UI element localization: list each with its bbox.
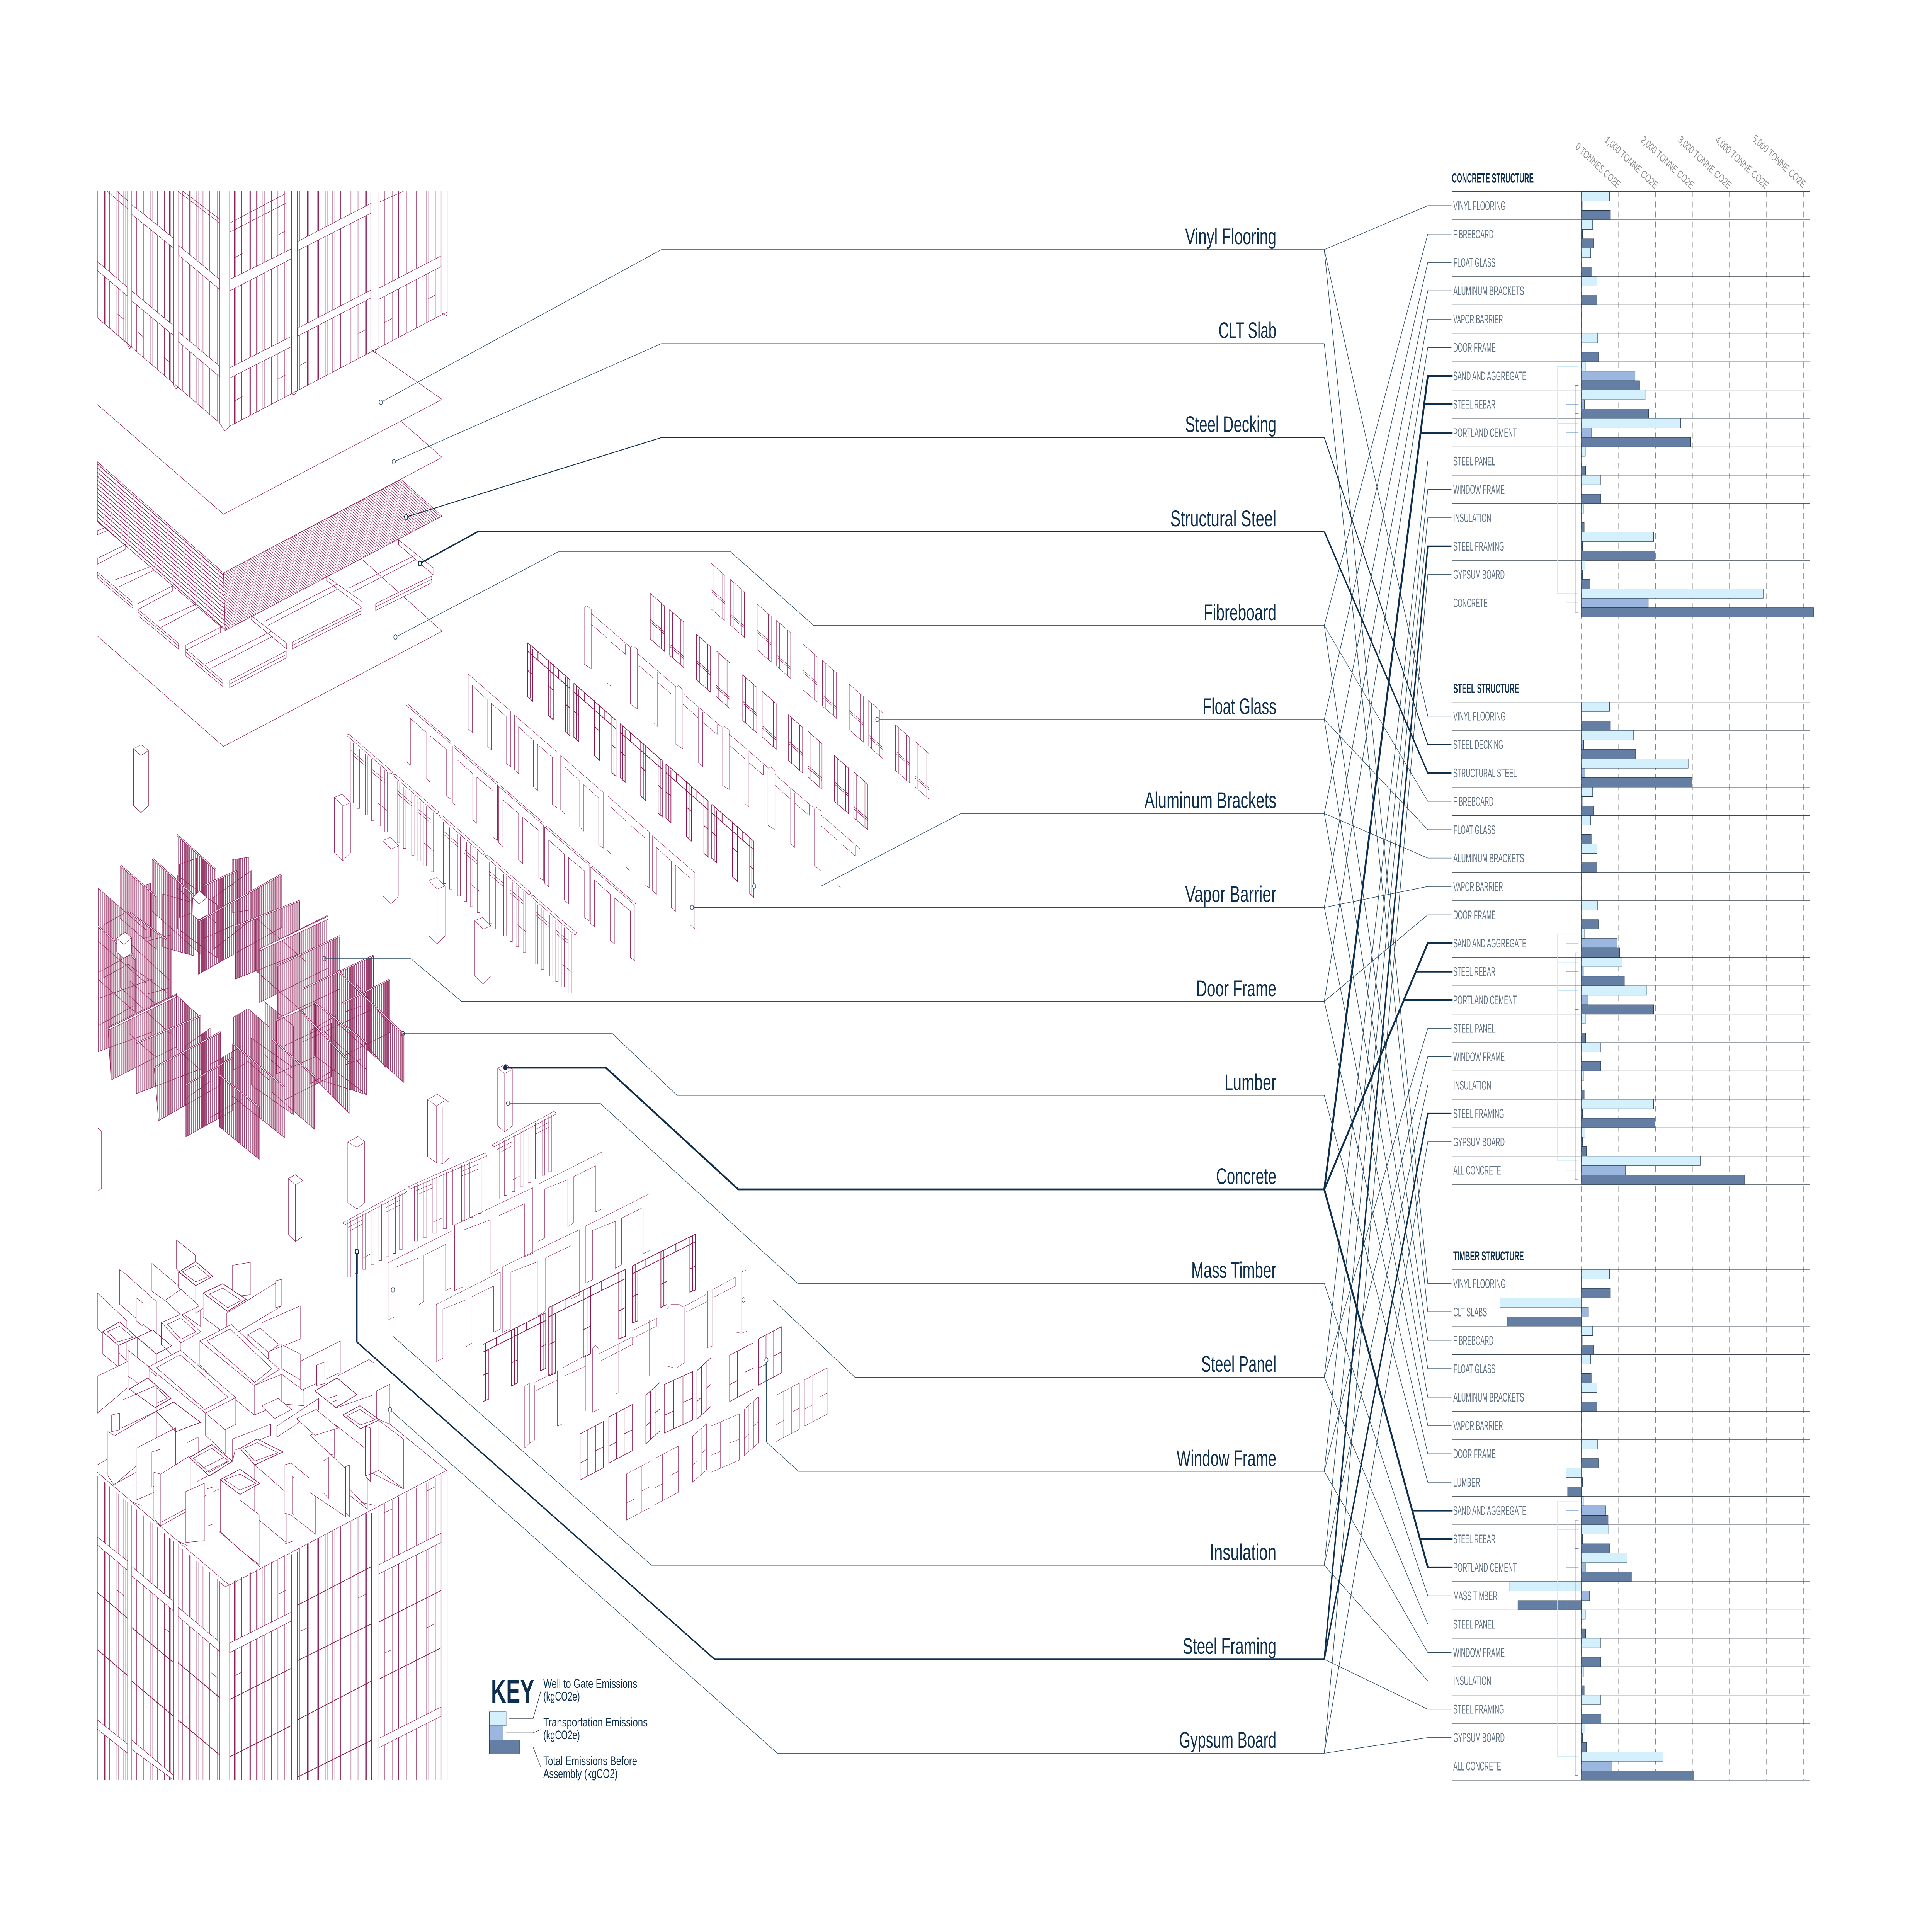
row: CLT slabs	[1452, 1298, 1810, 1326]
row: fibreboard: FIBREBOARD	[1453, 794, 1493, 808]
row: steel rebar: STEEL REBAR	[1453, 398, 1495, 411]
row: steel framing	[1452, 532, 1810, 560]
material label: Float Glass: Float Glass	[1202, 694, 1276, 719]
row: window frame	[1452, 1043, 1810, 1071]
key leader lines	[506, 1690, 541, 1768]
row: portland cement: PORTLAND CEMENT	[1453, 426, 1517, 440]
lower lintel wall	[525, 1270, 747, 1448]
row: window frame: WINDOW FRAME	[1453, 483, 1505, 497]
row: sand and aggregate: SAND AND AGGREGATE	[1453, 1504, 1526, 1517]
heading: steel structure: STEEL STRUCTURE	[1453, 682, 1519, 696]
row: steel panel: STEEL PANEL	[1453, 1618, 1495, 1631]
axis labels	[1574, 131, 1807, 192]
row: insulation: INSULATION	[1453, 1674, 1491, 1688]
row: gypsum board	[1452, 1128, 1810, 1156]
row: fibreboard: FIBREBOARD	[1453, 1334, 1493, 1347]
material label: Lumber	[401, 1031, 1324, 1095]
row: lumber: LUMBER	[1453, 1476, 1480, 1489]
row: sand and aggregate: SAND AND AGGREGATE	[1453, 937, 1526, 950]
row: all concrete total: ALL CONCRETE	[1453, 1759, 1501, 1773]
row: window frame: WINDOW FRAME	[1453, 1646, 1505, 1660]
row: steel panel	[1452, 1610, 1810, 1638]
material label: Steel Framing: Steel Framing	[1183, 1633, 1276, 1659]
row: lintel walls	[584, 606, 861, 888]
row: aluminum brackets	[1452, 277, 1810, 305]
row: vinyl flooring	[1452, 1269, 1810, 1298]
row: aluminum brackets: ALUMINUM BRACKETS	[1453, 851, 1524, 865]
swatch: transportation	[489, 1726, 503, 1740]
row: vapor barrier: VAPOR BARRIER	[1453, 880, 1503, 893]
row: float glass	[1452, 248, 1810, 277]
upper wall and window assemblies	[335, 563, 929, 993]
material label: CLT Slab: CLT Slab	[1219, 318, 1276, 343]
row: steel rebar	[1452, 1525, 1810, 1553]
connector fan: steel framing	[1324, 546, 1451, 1659]
row: steel framing: STEEL FRAMING	[1453, 539, 1504, 553]
floor plates, decking and steel beams	[97, 349, 442, 747]
heading: concrete structure: CONCRETE STRUCTURE	[1452, 171, 1534, 186]
lower columns	[348, 1064, 512, 1209]
row: steel rebar: STEEL REBAR	[1453, 965, 1495, 979]
key	[489, 1673, 648, 1781]
axis labels: 1,000 TONNE CO2E	[1603, 133, 1660, 192]
illustration: exploded isometric building	[97, 190, 929, 1783]
steel beams	[97, 527, 434, 688]
axis labels: 2,000 TONNE CO2E	[1639, 133, 1696, 192]
row: steel panel: STEEL PANEL	[1453, 1022, 1495, 1035]
material label: Door Frame	[323, 956, 1324, 1002]
row: door frame: DOOR FRAME	[1453, 341, 1496, 355]
row: concrete total: CONCRETE	[1453, 596, 1488, 610]
row: sand and aggregate	[1452, 1497, 1810, 1525]
material label: Float Glass	[876, 694, 1324, 722]
row: insulation: INSULATION	[1453, 1078, 1491, 1092]
material label: Gypsum Board: Gypsum Board	[1179, 1727, 1276, 1753]
row: door frame: DOOR FRAME	[1453, 908, 1496, 922]
row: mass timber: MASS TIMBER	[1453, 1589, 1497, 1603]
row: steel panel	[1452, 447, 1810, 475]
row: steel rebar: STEEL REBAR	[1453, 1532, 1495, 1546]
key text: total: Total Emissions Before	[543, 1754, 637, 1768]
bracket: concrete components sum	[1557, 366, 1578, 612]
row: aluminum brackets	[1452, 844, 1810, 872]
row: steel panel: STEEL PANEL	[1453, 454, 1495, 468]
material label: Vinyl Flooring	[379, 224, 1324, 405]
row: portland cement	[1452, 1553, 1810, 1582]
row: fibreboard	[1452, 787, 1810, 816]
swatch: well to gate	[489, 1712, 506, 1726]
row: float glass	[1452, 815, 1810, 844]
lumber stud wall framing	[98, 835, 404, 1191]
material label: Structural Steel	[418, 506, 1324, 566]
material label: Structural Steel: Structural Steel	[1170, 506, 1276, 531]
material label: Mass Timber	[507, 1101, 1324, 1283]
row: insulation	[1452, 1071, 1810, 1099]
row: mass timber	[1452, 1582, 1810, 1610]
row: steel framing: STEEL FRAMING	[1453, 1703, 1504, 1716]
steel decking: left wing	[97, 462, 225, 631]
key text: transportation: Transportation Emissions	[543, 1715, 648, 1729]
row: gypsum board: GYPSUM BOARD	[1453, 1135, 1505, 1149]
material label: Concrete	[503, 1065, 1324, 1189]
material label: Concrete: Concrete	[1216, 1163, 1276, 1189]
material label: Vapor Barrier: Vapor Barrier	[1185, 881, 1276, 907]
material label: Mass Timber: Mass Timber	[1191, 1257, 1276, 1283]
row: CLT slabs: CLT SLABS	[1453, 1305, 1487, 1319]
material label: Insulation	[391, 1288, 1324, 1565]
swatch: total	[489, 1740, 520, 1754]
bracket: steel structure concrete components sum	[1557, 934, 1578, 1180]
row: all concrete total	[1452, 1156, 1810, 1184]
lower building facade	[97, 1232, 441, 1783]
row: dark window units	[650, 594, 868, 830]
chart gridlines: emission scale	[1582, 192, 1803, 1780]
key title: KEY	[491, 1673, 534, 1709]
row: aluminum brackets	[1452, 1383, 1810, 1411]
partial column at the page edge	[98, 1128, 102, 1191]
row: vinyl flooring: VINYL FLOORING	[1453, 199, 1505, 213]
material label: Window Frame	[765, 1358, 1324, 1471]
row: vapor barrier: VAPOR BARRIER	[1453, 313, 1503, 326]
bracket: timber structure concrete components sum	[1557, 1501, 1578, 1776]
row: gypsum board: GYPSUM BOARD	[1453, 1731, 1505, 1745]
row: sand and aggregate: SAND AND AGGREGATE	[1453, 369, 1526, 383]
row: window frame	[1452, 1638, 1810, 1667]
chart: timber structure	[1452, 1249, 1810, 1780]
row: all concrete total: ALL CONCRETE	[1453, 1163, 1501, 1177]
row: thin door openings	[468, 674, 695, 929]
connector fan: structural steel	[1324, 532, 1451, 773]
connector fan: materials to chart rows, thin lines	[1324, 206, 1451, 1753]
material label: Aluminum Brackets	[753, 788, 1324, 888]
row: concrete total	[1452, 589, 1813, 617]
lone columns	[134, 745, 303, 1242]
material label: Steel Panel	[742, 1298, 1324, 1377]
material label: Steel Framing	[355, 1249, 1324, 1659]
material label: Window Frame: Window Frame	[1177, 1446, 1276, 1471]
key text: transportation: (kgCO2e)	[543, 1728, 580, 1742]
lower dark framed openings	[483, 1234, 695, 1402]
dark room rims on the roof level	[103, 1262, 379, 1494]
key text: well to gate: Well to Gate Emissions	[543, 1677, 637, 1691]
row: light window units	[711, 563, 929, 799]
row: insulation	[1452, 503, 1810, 532]
row: float glass: FLOAT GLASS	[1454, 1362, 1495, 1376]
row: door frame	[1452, 333, 1810, 362]
material label: Fibreboard: Fibreboard	[1204, 600, 1276, 625]
row: aluminum brackets: ALUMINUM BRACKETS	[1453, 1390, 1524, 1404]
row: steel rebar	[1452, 390, 1810, 418]
row: lumber	[1452, 1468, 1810, 1497]
row: stud panels	[346, 734, 577, 993]
row: vinyl flooring: VINYL FLOORING	[1453, 709, 1505, 723]
material label: Vinyl Flooring: Vinyl Flooring	[1185, 224, 1276, 249]
row: vinyl flooring	[1452, 192, 1810, 220]
row: sand and aggregate	[1452, 929, 1810, 958]
key text: total: Assembly (kgCO2)	[543, 1767, 617, 1781]
row: gypsum board: GYPSUM BOARD	[1453, 568, 1505, 582]
row: portland cement: PORTLAND CEMENT	[1453, 993, 1517, 1007]
row: plated door openings	[406, 704, 636, 961]
row: vinyl flooring	[1452, 702, 1810, 730]
row: door frame: DOOR FRAME	[1453, 1447, 1496, 1461]
row: structural steel: STRUCTURAL STEEL	[1453, 766, 1517, 780]
row: float glass: FLOAT GLASS	[1454, 823, 1495, 837]
row: vinyl flooring: VINYL FLOORING	[1453, 1277, 1505, 1291]
row: dark steel framed openings	[528, 643, 754, 897]
row: vapor barrier: VAPOR BARRIER	[1453, 1419, 1503, 1432]
row: steel decking: STEEL DECKING	[1453, 738, 1503, 752]
axis labels: 5,000 TONNE CO2E	[1751, 131, 1807, 191]
upper building facade	[97, 191, 447, 431]
row: door frame	[1452, 901, 1810, 929]
material label: Vapor Barrier	[690, 881, 1324, 910]
row: structural steel	[1452, 759, 1810, 787]
row: steel framing: STEEL FRAMING	[1453, 1107, 1504, 1121]
material label: Steel Panel: Steel Panel	[1201, 1351, 1276, 1377]
material label: Lumber: Lumber	[1225, 1070, 1276, 1095]
steel decking: right wing	[223, 480, 442, 631]
lower building: interior walls and facade	[97, 1232, 447, 1783]
material label: Steel Decking	[405, 412, 1324, 519]
row: steel framing	[1452, 1695, 1810, 1723]
lower gypsum or fibreboard plate	[97, 558, 442, 747]
interior walls on the roof level	[97, 1240, 403, 1565]
material label: CLT Slab	[392, 318, 1324, 464]
axis labels: 3,000 TONNE CO2E	[1677, 133, 1733, 192]
roof edge lines	[97, 1424, 447, 1585]
row: fibreboard	[1452, 220, 1810, 248]
connector fan: steel decking	[1324, 437, 1451, 745]
row: portland cement: PORTLAND CEMENT	[1453, 1561, 1517, 1574]
material label: Gypsum Board	[388, 1407, 1324, 1753]
row: sand and aggregate	[1452, 362, 1810, 390]
CLT slab plate	[223, 422, 442, 573]
row: columns	[335, 794, 491, 984]
lower door openings	[388, 1152, 650, 1361]
vinyl flooring plate	[97, 349, 442, 514]
connector fan: concrete components	[1324, 376, 1452, 1567]
chart: concrete structure	[1452, 171, 1813, 617]
material label: Door Frame: Door Frame	[1196, 976, 1276, 1001]
row: insulation	[1452, 1667, 1810, 1695]
row: aluminum brackets: ALUMINUM BRACKETS	[1453, 284, 1524, 298]
axis labels: 4,000 TONNE CO2E	[1714, 133, 1770, 192]
row: window frame: WINDOW FRAME	[1453, 1050, 1505, 1064]
row: fibreboard: FIBREBOARD	[1453, 227, 1493, 241]
row: float glass: FLOAT GLASS	[1454, 256, 1495, 269]
lower dark windows	[580, 1327, 782, 1480]
material label: Steel Decking: Steel Decking	[1185, 412, 1276, 437]
row: steel decking	[1452, 730, 1810, 759]
row: gypsum board	[1452, 560, 1810, 589]
row: steel rebar	[1452, 958, 1810, 986]
row: portland cement	[1452, 418, 1810, 447]
row: fibreboard	[1452, 1326, 1810, 1354]
row: steel framing	[1452, 1099, 1810, 1128]
row: gypsum board	[1452, 1723, 1810, 1752]
key text: well to gate: (kgCO2e)	[543, 1689, 580, 1703]
material label: Fibreboard	[394, 552, 1324, 640]
material label: Aluminum Brackets: Aluminum Brackets	[1145, 788, 1276, 813]
lower light windows	[626, 1368, 828, 1520]
chart: steel structure	[1452, 682, 1810, 1184]
row: all concrete total	[1452, 1752, 1810, 1780]
row: portland cement	[1452, 986, 1810, 1014]
material label: Insulation: Insulation	[1210, 1539, 1276, 1565]
axis labels: 0 TONNES CO2E	[1574, 139, 1622, 191]
row: float glass	[1452, 1354, 1810, 1383]
lower stud panels	[343, 1111, 556, 1277]
heading: timber structure: TIMBER STRUCTURE	[1453, 1249, 1524, 1264]
row: window frame	[1452, 475, 1810, 503]
row: door frame	[1452, 1440, 1810, 1468]
lower wall and window assemblies	[343, 1064, 828, 1520]
row: insulation: INSULATION	[1453, 511, 1491, 525]
row: steel panel	[1452, 1014, 1810, 1043]
